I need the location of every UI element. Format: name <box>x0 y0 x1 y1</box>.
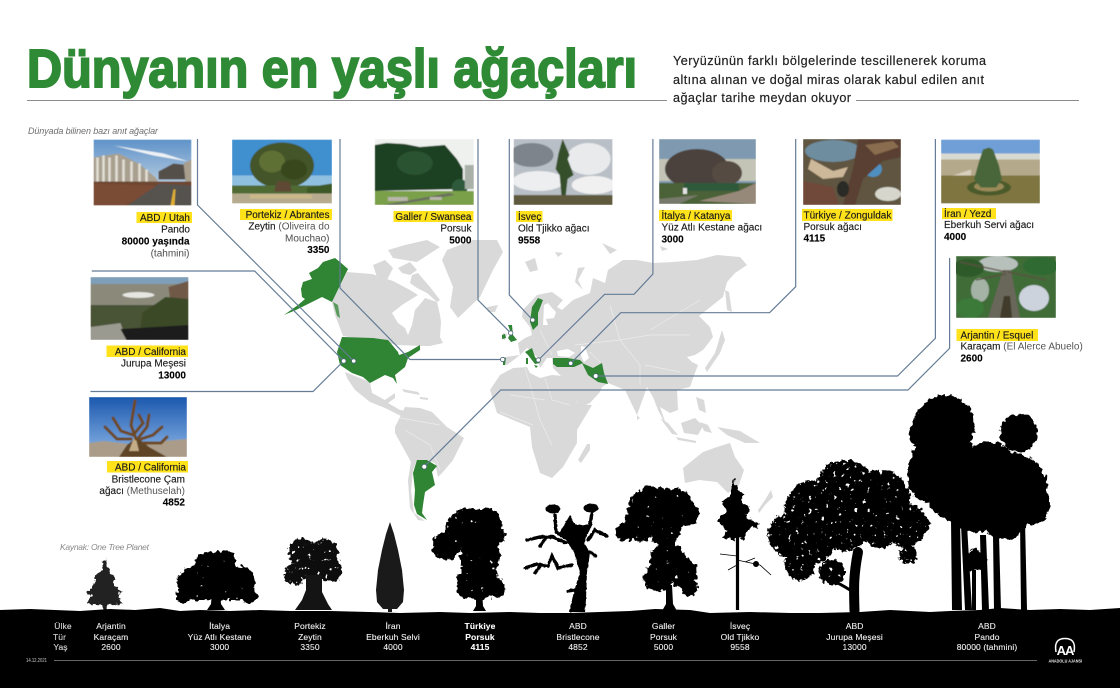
label: Türkiye / Zonguldak: Porsuk ağacı <box>804 222 862 233</box>
tree: İtalya <box>176 551 257 604</box>
table column: İtalya: Yüz Atlı Kestane <box>188 632 252 642</box>
table column: Galler <box>650 621 678 652</box>
landmass: africa <box>490 367 592 478</box>
table column: İran: Eberkuh Selvi <box>366 632 420 642</box>
country: argentina <box>413 460 437 520</box>
label: Portekiz / Abrantes: Zeytin (Oliveira do <box>248 222 330 232</box>
country: italy <box>525 348 540 368</box>
trunk and branches: İsveç <box>720 530 771 610</box>
landmass: north america <box>332 272 443 417</box>
table column: İsveç: Old Tjikko <box>721 632 759 642</box>
photo: Porsuk Türkiye <box>803 139 901 205</box>
label: ABD / Utah: 80000 yaşında <box>122 236 190 248</box>
label: Galler / Swansea: Porsuk <box>440 224 472 234</box>
table column: Portekiz: 3350 <box>300 642 320 652</box>
borders <box>400 300 700 470</box>
label: ABD / California Bristlecone: 4852 <box>163 498 185 508</box>
table column: İran <box>366 621 420 652</box>
location dots <box>341 318 598 469</box>
label: ABD / California Jurupa <box>106 346 188 382</box>
logo: Anadolu Ajansı <box>1048 638 1082 664</box>
source note: Kaynak: One Tree Planet <box>60 542 150 552</box>
landmass: greenland <box>442 240 503 318</box>
label: İsveç <box>516 210 590 246</box>
table column: İran: İran <box>385 621 401 631</box>
leader lines <box>90 139 950 467</box>
table column: İtalya: 3000 <box>210 642 229 652</box>
photo: Zeytin <box>232 140 332 204</box>
ground table: row headers <box>53 621 72 652</box>
table column: İtalya: İtalya <box>209 621 230 631</box>
tree: Arjantin <box>87 558 123 610</box>
table column: İsveç: İsveç <box>730 621 751 631</box>
table column: Arjantin: Arjantin <box>96 621 126 631</box>
ground table: row headers: Yaş <box>53 642 68 652</box>
label: İtalya / Katanya: İtalya / Katanya <box>662 209 731 222</box>
label: Türkiye / Zonguldak: 4115 <box>804 234 826 244</box>
label: İtalya / Katanya: Yüz Atlı Kestane ağacı <box>662 222 762 234</box>
label: Arjantin / Esquel: Karaçam (El Alerce Abuelo) <box>960 342 1083 352</box>
photo: Old Tjikko <box>514 139 613 205</box>
label: Portekiz / Abrantes <box>240 209 332 256</box>
photo: Karaçam <box>956 256 1056 318</box>
label: Portekiz / Abrantes: 3350 <box>307 245 330 256</box>
table column: İsveç: 9558 <box>730 642 750 652</box>
intro text: altına alınan ve doğal miras olarak kabul edilen anıt <box>673 73 984 87</box>
label: ABD / California Bristlecone: ABD / California <box>115 462 186 474</box>
table column: Arjantin <box>94 621 128 652</box>
label: Portekiz / Abrantes: Portekiz / Abrantes <box>246 210 330 221</box>
tree: İran <box>376 522 404 612</box>
seas <box>543 303 589 362</box>
table column: Türkiye: Porsuk <box>465 632 495 642</box>
country: panhandle <box>333 302 340 318</box>
trunk: Galler <box>662 585 677 611</box>
ground table: row headers: Ülke <box>54 621 72 631</box>
intro text <box>673 54 986 105</box>
table column: ABD Pando: Pando <box>974 632 1000 642</box>
ground <box>0 608 1120 688</box>
country: alaska <box>284 258 348 315</box>
tree: Bristlecone <box>525 504 607 612</box>
photo: Porsuk Galler <box>374 139 474 205</box>
label: Arjantin / Esquel: Arjantin / Esquel <box>960 330 1033 342</box>
table column: Türkiye <box>465 621 496 652</box>
photo: Eberkuh <box>941 140 1040 204</box>
label: ABD / California Bristlecone: ağacı (Methuselah) <box>99 486 185 497</box>
photo: Pando <box>94 140 192 206</box>
label: İtalya / Katanya <box>659 209 762 246</box>
label: Arjantin / Esquel <box>956 329 1083 364</box>
label: ABD / Utah: ABD / Utah <box>140 213 190 224</box>
logo: Anadolu Ajansı: ANADOLU AJANSI <box>1048 658 1082 664</box>
label: İran / Yezd: İran / Yezd <box>944 207 991 220</box>
table column: Arjantin: Karaçam <box>94 632 128 642</box>
label: İsveç: İsveç <box>518 210 541 223</box>
table column: ABD Bristlecone: ABD <box>569 621 587 631</box>
table column: Arjantin: 2600 <box>101 642 121 652</box>
table column: Galler: Galler <box>652 621 675 631</box>
table column: Galler: 5000 <box>654 642 673 652</box>
country: sweden <box>530 298 543 330</box>
table column: İtalya <box>188 621 252 652</box>
intro text: Yeryüzünün farklı bölgelerinde tescillenerek koruma <box>673 54 986 68</box>
label: ABD / California Bristlecone <box>99 461 188 508</box>
photo: Bristlecone <box>89 397 187 457</box>
landmass: eurasia <box>503 255 747 427</box>
label: İsveç: 9558 <box>518 236 541 246</box>
table column: ABD Jurupa <box>826 621 883 652</box>
label: ABD / California Jurupa: 13000 <box>158 370 186 382</box>
table column: ABD Bristlecone: 4852 <box>568 642 588 652</box>
trunk: Jurupa <box>822 552 858 611</box>
photo: Jurupa <box>90 277 188 340</box>
country: iran <box>582 363 608 384</box>
table column: Türkiye: Türkiye <box>465 621 496 631</box>
tree: Pando <box>908 395 1050 610</box>
table column: ABD Jurupa: Jurupa Meşesi <box>826 632 883 642</box>
table column: İsveç <box>721 621 759 652</box>
label: İran / Yezd: 4000 <box>944 232 967 243</box>
label: ABD / Utah <box>122 212 192 260</box>
label: İsveç: Old Tjikko ağacı <box>518 224 590 234</box>
photo: Kestane <box>659 139 756 204</box>
landmass: south america <box>395 407 464 521</box>
table column: Portekiz <box>294 621 326 652</box>
label: ABD / Utah: Pando <box>161 224 190 236</box>
date: 14.12.2021 <box>26 658 47 664</box>
ground table: row headers: Tür <box>53 632 66 642</box>
table column: Galler: Porsuk <box>650 632 678 642</box>
tree: İsveç <box>718 477 760 540</box>
landmass: arctic islands <box>373 240 440 400</box>
table column: Portekiz: Zeytin <box>298 632 322 642</box>
country: uk <box>502 325 517 342</box>
tree: Galler <box>616 486 699 596</box>
tree: Portekiz <box>284 538 342 585</box>
table column: Türkiye: 4115 <box>471 642 490 652</box>
label: Galler / Swansea: 5000 <box>449 236 472 246</box>
logo: Anadolu Ajansı: AA <box>1057 643 1075 658</box>
table column: ABD Bristlecone <box>556 621 600 652</box>
label: Portekiz / Abrantes: Mouchao) <box>285 234 330 244</box>
country: usa <box>337 337 420 384</box>
country: portugal <box>503 357 506 365</box>
label: İran / Yezd <box>942 207 1034 243</box>
table column: ABD Jurupa: ABD <box>846 621 863 631</box>
trunk: Türkiye <box>473 590 486 611</box>
country: turkey <box>553 358 583 367</box>
title: Dünyanın en yaşlı ağaçları <box>27 39 637 99</box>
trunk: Portekiz <box>295 575 332 610</box>
table column: Portekiz: Portekiz <box>294 621 326 631</box>
tree: Türkiye <box>432 508 505 600</box>
label: Galler / Swansea <box>394 211 474 246</box>
label: Türkiye / Zonguldak <box>802 209 892 244</box>
landmass: islands <box>487 243 773 513</box>
subtitle note: Dünyada bilinen bazı anıt ağaçlar <box>28 126 159 136</box>
intro text: ağaçlar tarihe meydan okuyor <box>673 91 851 105</box>
label: İtalya / Katanya: 3000 <box>662 234 684 246</box>
table column: ABD Pando: 80000 (tahmini) <box>957 642 1017 652</box>
tree: Jurupa <box>768 460 930 585</box>
table column: ABD Bristlecone: Bristlecone <box>556 632 600 642</box>
label: Galler / Swansea: Galler / Swansea <box>395 212 472 223</box>
label: ABD / California Jurupa: ABD / California <box>115 347 186 358</box>
label: Türkiye / Zonguldak: Türkiye / Zonguldak <box>804 210 892 222</box>
world map <box>284 240 773 521</box>
table column: ABD Jurupa: 13000 <box>843 642 867 652</box>
label: İran / Yezd: Eberkuh Servi ağacı <box>944 220 1034 231</box>
label: ABD / California Bristlecone: Bristlecone Çam <box>112 474 185 486</box>
table column: ABD Pando: ABD <box>978 621 996 631</box>
trunk: İtalya <box>207 590 225 610</box>
label: ABD / Utah: (tahmini) <box>151 248 190 260</box>
table column: ABD Pando <box>957 621 1017 652</box>
label: ABD / California Jurupa: Jurupa Meşesi <box>121 358 186 370</box>
table column: İran: 4000 <box>383 642 403 652</box>
label: Arjantin / Esquel: 2600 <box>960 354 983 364</box>
